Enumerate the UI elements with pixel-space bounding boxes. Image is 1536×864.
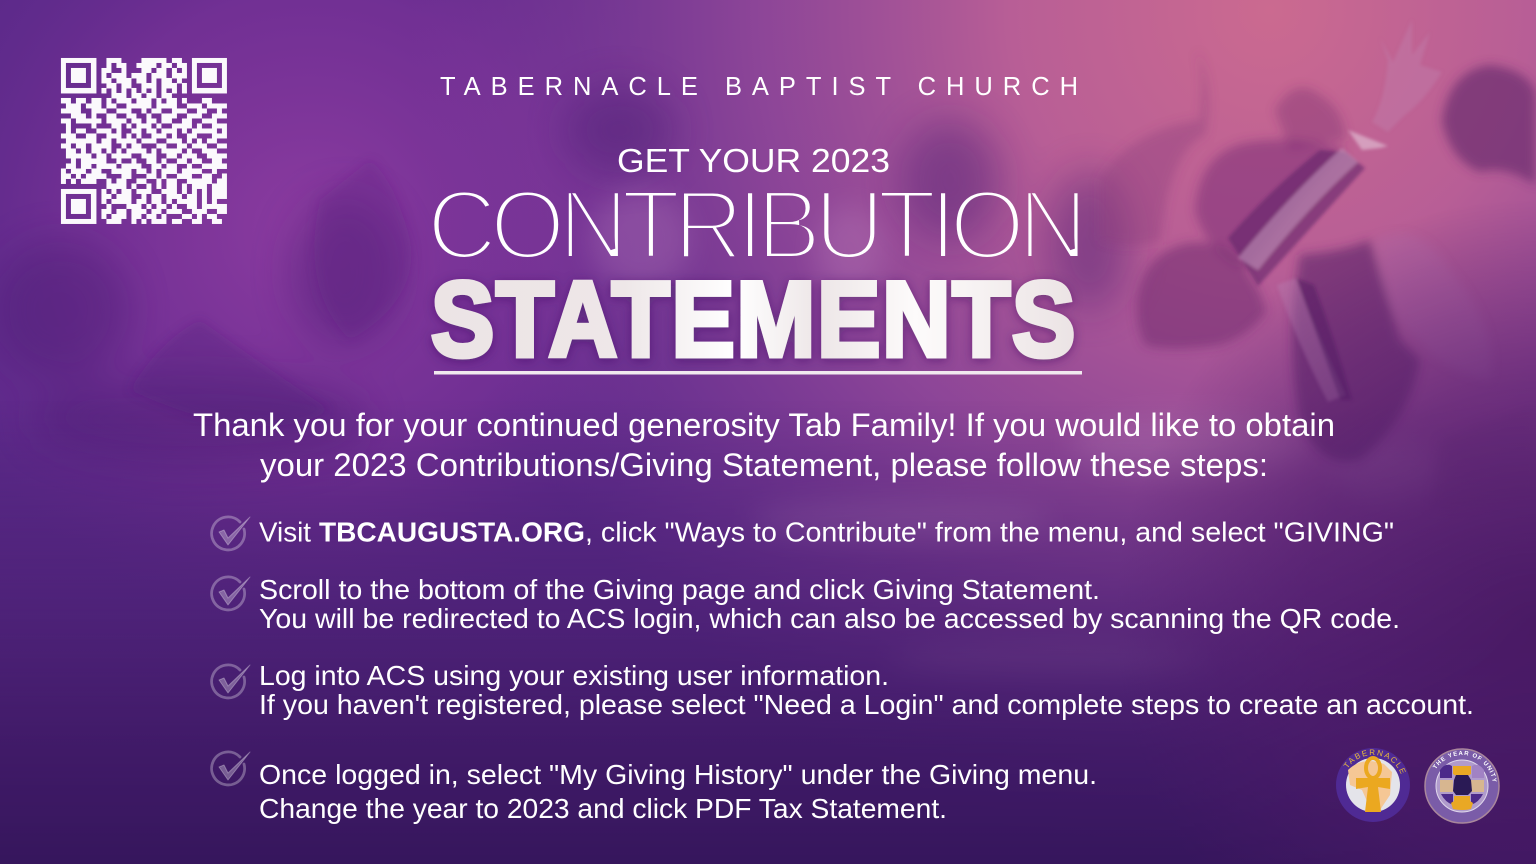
background photo: worshippers with raised hands [0, 20, 1536, 678]
step 1 [212, 516, 1394, 550]
step 4 [212, 752, 1097, 824]
intro text: Thank you for your continued generosity Tab Family! If you would like to obtain [193, 407, 1335, 443]
step 3: If you haven't registered, please select "Need a Login" and complete steps to create an account. [259, 689, 1474, 720]
title: statements: STATEMENTS [431, 259, 1077, 379]
title underline [434, 371, 1082, 374]
step 1: Visit [259, 516, 311, 548]
step 4: Once logged in, select "My Giving History" under the Giving menu. [259, 759, 1097, 790]
step 3 [212, 660, 1474, 720]
step 2 [212, 574, 1400, 634]
logo: Tabernacle Baptist Church ankh seal: TABERNACLE [1343, 750, 1406, 774]
subheading: get your 2023: GET YOUR 2023 [617, 142, 890, 179]
intro text [193, 407, 1335, 483]
icon: check mark 1 [212, 517, 250, 550]
intro text: your 2023 Contributions/Giving Statement, please follow these steps: [260, 447, 1268, 483]
background: lower dark overlay [0, 200, 1536, 864]
logo: The Year of Unity puzzle seal: THE YEAR OF UNITY [1432, 750, 1497, 782]
step 2: Scroll to the bottom of the Giving page and click Giving Statement. [259, 574, 1100, 605]
icon: check mark 4 [212, 752, 250, 785]
logo: The Year of Unity puzzle seal [1424, 748, 1500, 824]
icon: check mark 2 [212, 577, 250, 610]
step 4: Change the year to 2023 and click PDF Tax Statement. [259, 793, 947, 824]
step 3: Log into ACS using your existing user information. [259, 660, 889, 691]
raised arm with striped sleeve [1228, 20, 1442, 402]
step 1: , click "Ways to Contribute" from the menu, and select "GIVING" [585, 516, 1394, 548]
church name heading: TABERNACLE BAPTIST CHURCH [440, 73, 1078, 101]
icon: check mark 3 [212, 665, 250, 698]
title: contribution: CONTRIBUTION [427, 170, 1081, 280]
step 2: You will be redirected to ACS login, which can also be accessed by scanning the QR code. [259, 603, 1400, 634]
logo: Tabernacle Baptist Church ankh seal [1336, 748, 1410, 822]
step 1: TBCAUGUSTA.ORG [319, 516, 585, 548]
QR code [61, 61, 227, 221]
